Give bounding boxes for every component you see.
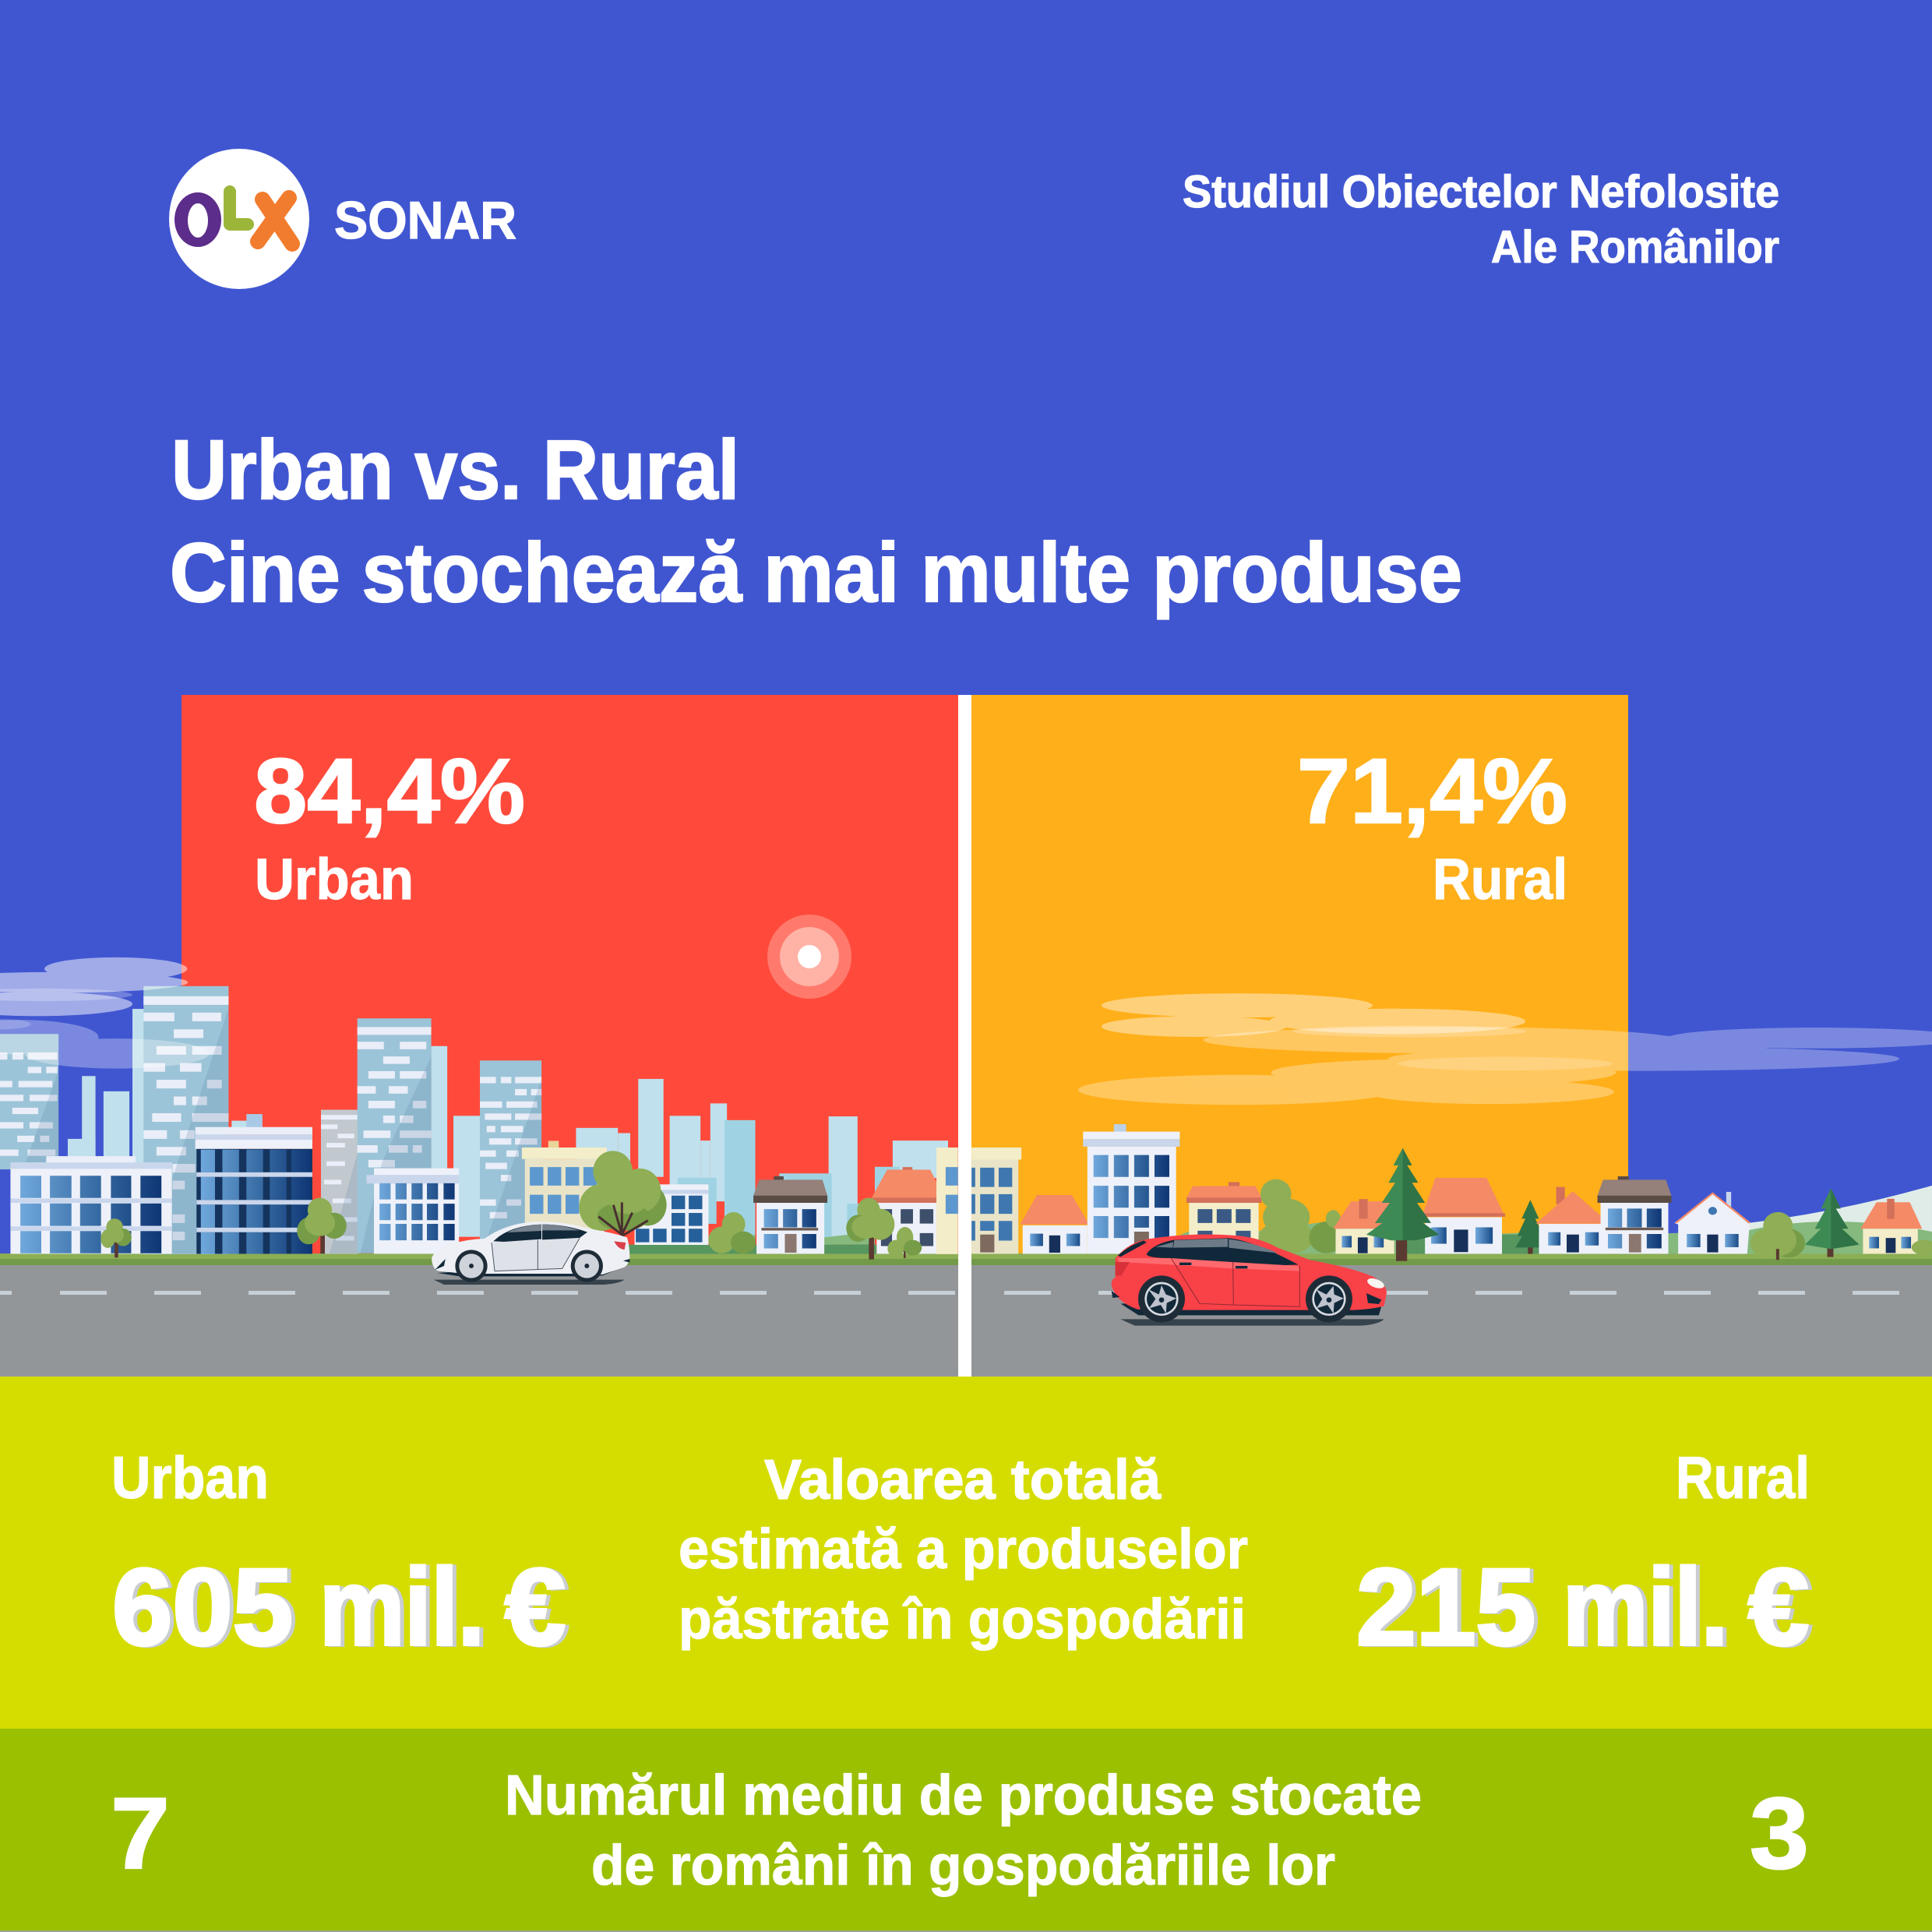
bushes behind the red car xyxy=(1259,1179,1344,1254)
tree in front of dark block xyxy=(297,1198,347,1253)
panel: rural orange xyxy=(971,695,1628,1287)
main heading xyxy=(170,422,1462,619)
background skyline xyxy=(68,1009,948,1253)
red car xyxy=(1112,1235,1387,1326)
rural value xyxy=(1356,1445,1810,1668)
average description: de români în gospodăriile lor xyxy=(591,1835,1335,1897)
small tree left xyxy=(100,1218,132,1257)
value description: păstrate în gospodării xyxy=(679,1588,1246,1651)
study title xyxy=(1183,167,1779,273)
stat: urban percentage xyxy=(254,740,525,911)
white car xyxy=(432,1222,629,1285)
urban value: 605 xyxy=(112,1546,293,1668)
cream house with orange roof xyxy=(1186,1182,1262,1253)
brown roof house xyxy=(1598,1176,1671,1253)
urban value xyxy=(111,1445,566,1668)
road and grass xyxy=(0,1253,1932,1377)
brand name: SONAR xyxy=(334,191,516,250)
stat: urban percentage: Urban xyxy=(255,847,414,911)
rural value: € xyxy=(1748,1546,1809,1668)
value description: estimată a produselor xyxy=(679,1518,1248,1581)
small blue building xyxy=(635,1184,708,1245)
brown roof house xyxy=(753,1176,827,1253)
value description: Valoarea totală xyxy=(764,1449,1162,1511)
office block with dark glass xyxy=(196,1127,312,1253)
rural average number: 3 xyxy=(1750,1776,1809,1890)
distant hill xyxy=(1176,1186,1932,1253)
icon: sun xyxy=(767,915,851,999)
urban value: Urban xyxy=(111,1445,269,1511)
rural value: Rural xyxy=(1676,1445,1810,1511)
main heading: Urban vs. Rural xyxy=(171,422,739,516)
main heading: Cine stochează mai multe produse xyxy=(170,525,1462,619)
white apartment block xyxy=(1083,1124,1179,1253)
urban value: mil. xyxy=(319,1546,485,1668)
urban value: € xyxy=(505,1546,566,1668)
cream apartment building xyxy=(522,1141,607,1254)
pine tree small xyxy=(1515,1200,1545,1253)
white divider xyxy=(958,695,971,1377)
cream building at the divider xyxy=(971,1148,1021,1253)
white gable house xyxy=(1674,1192,1750,1253)
pine tree right xyxy=(1805,1189,1860,1257)
low office block xyxy=(367,1169,459,1253)
rural value: mil. xyxy=(1563,1546,1728,1668)
bush behind the brown house xyxy=(708,1212,756,1253)
orange roof house xyxy=(872,1148,958,1254)
rural scene: clouds and village xyxy=(971,993,1932,1261)
panel: urban red xyxy=(182,695,958,1287)
clouds over the village xyxy=(1078,993,1932,1105)
study title: Studiul Obiectelor Nefolosite xyxy=(1183,167,1779,217)
value description xyxy=(679,1449,1248,1651)
rural value: 215 xyxy=(1356,1546,1535,1668)
tall towers xyxy=(0,986,541,1254)
study title: Ale Românilor xyxy=(1491,222,1779,273)
urban scene: city buildings xyxy=(0,957,958,1254)
panel: total value band xyxy=(0,1377,1932,1729)
office block with light windows xyxy=(10,1156,172,1253)
stat: rural percentage: 71,4% xyxy=(1297,740,1567,843)
cream house far right xyxy=(1860,1199,1932,1255)
urban average number: 7 xyxy=(111,1776,170,1890)
stat: rural percentage xyxy=(1297,740,1567,911)
house behind the pine xyxy=(1333,1199,1394,1253)
triangular roof house xyxy=(1535,1187,1609,1253)
two trees at the orange house xyxy=(846,1198,922,1260)
large tree behind the car xyxy=(579,1151,667,1236)
large white house xyxy=(1422,1178,1505,1253)
pine tree large xyxy=(1366,1148,1439,1261)
average description xyxy=(505,1765,1422,1897)
stat: urban percentage: 84,4% xyxy=(254,740,525,843)
small orange house xyxy=(1021,1195,1089,1253)
stat: rural percentage: Rural xyxy=(1433,847,1567,911)
panel: average products band xyxy=(0,1729,1932,1932)
average description: Numărul mediu de produse stocate xyxy=(505,1765,1422,1827)
bush right xyxy=(1750,1212,1805,1260)
clouds over the city xyxy=(0,957,210,1069)
logo: OLX in white circle xyxy=(169,149,309,289)
